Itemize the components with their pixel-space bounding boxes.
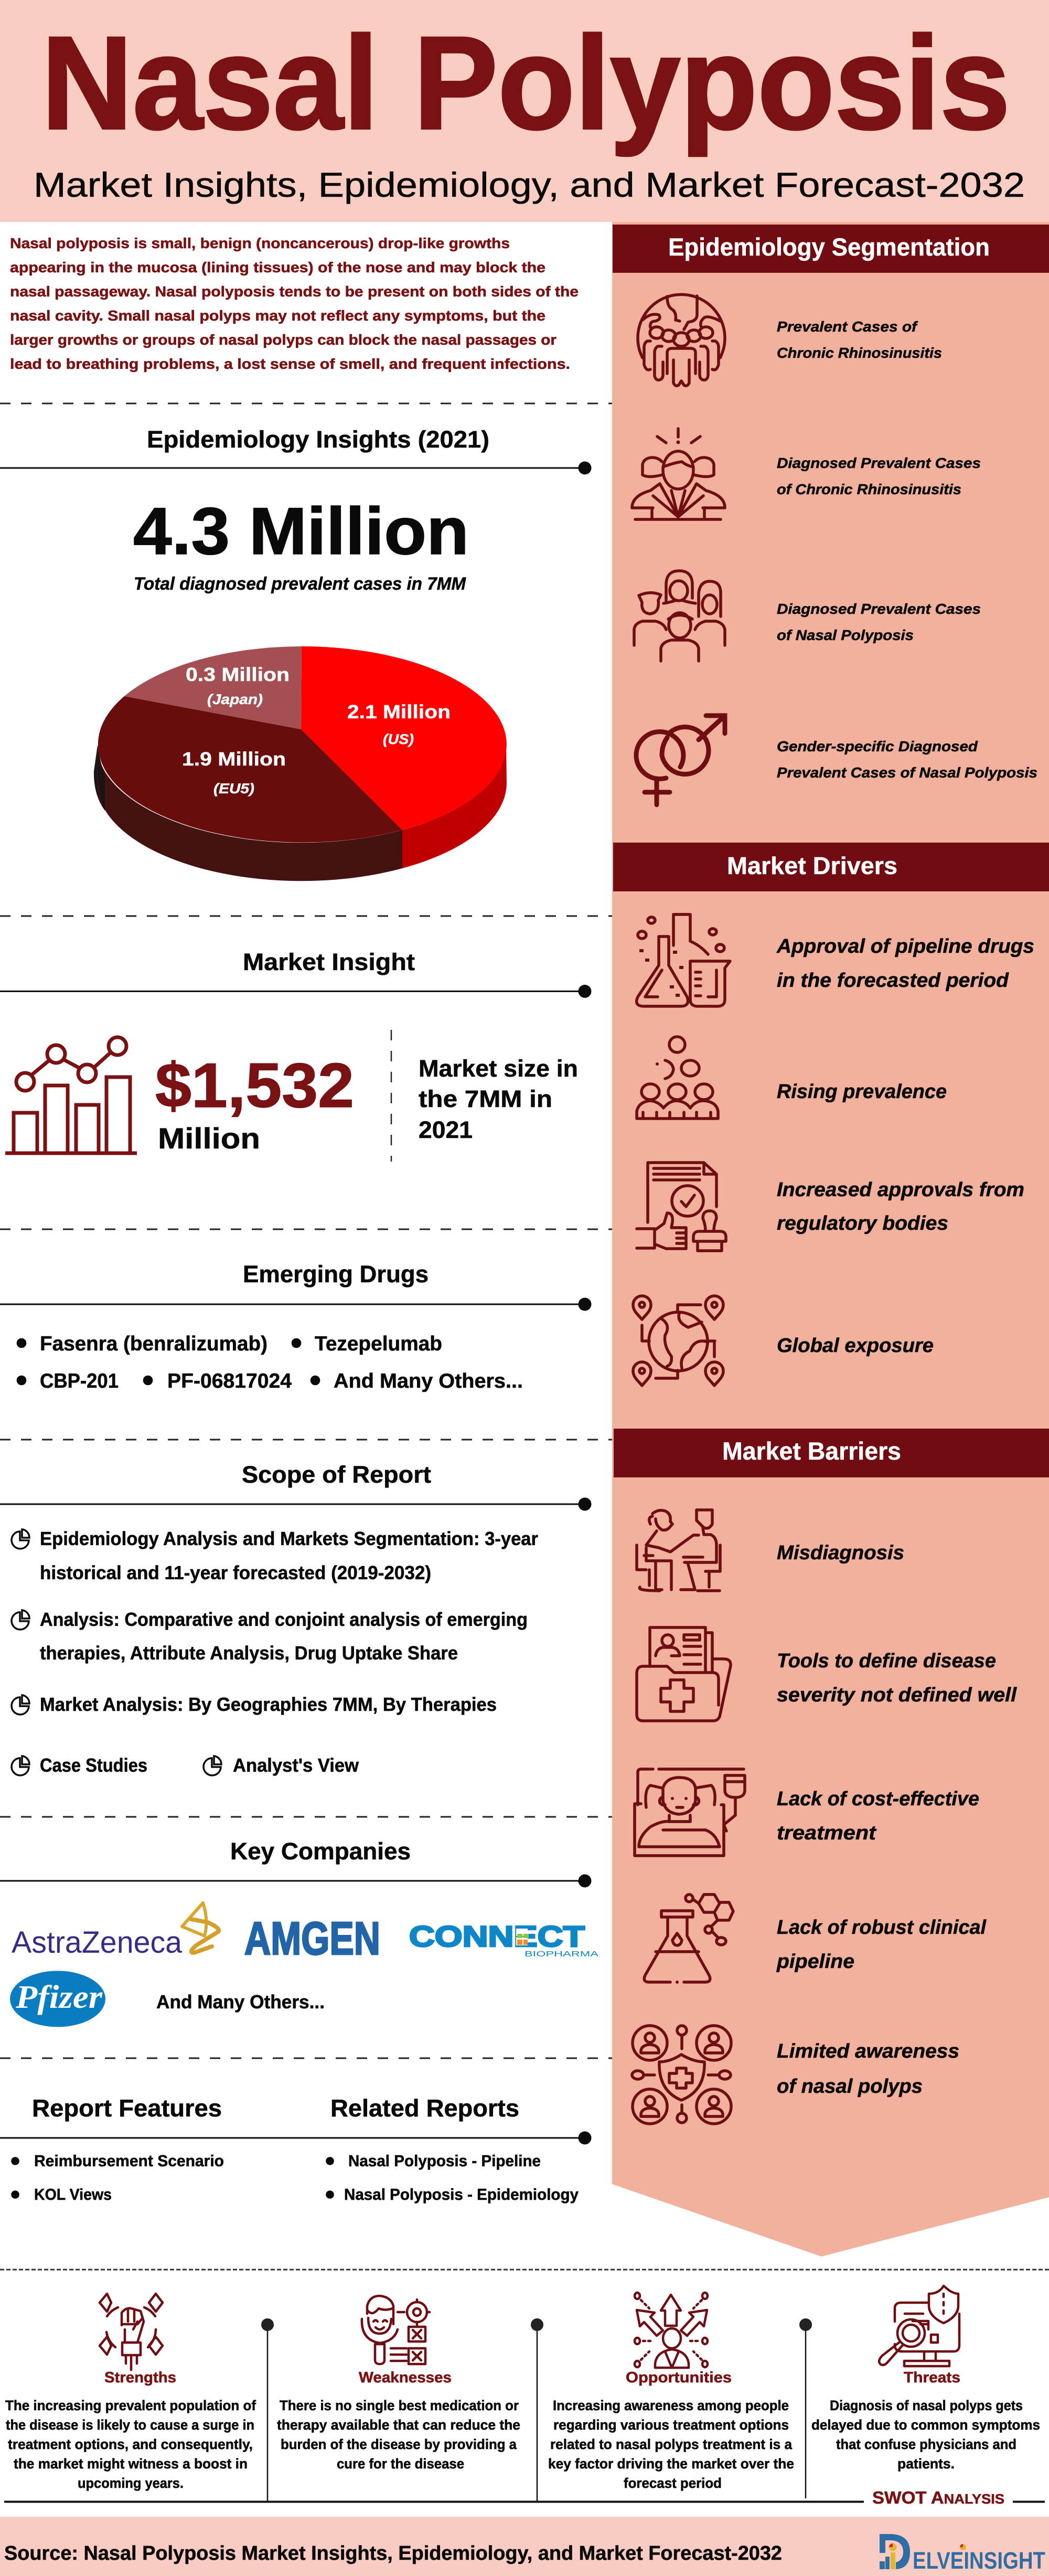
pie label: US: (US) [383,731,414,747]
heading bar: Market Barriers [722,1437,901,1465]
title: Nasal Polyposis [41,9,1010,157]
icon: doctor and patient [637,1510,720,1591]
feature and report lists: KOL Views [34,2185,112,2204]
logo: Amgen: AMGEN [244,1912,380,1964]
scope text: Epidemiology Analysis and Markets Segmentation: 3-year [40,1528,538,1549]
segment text 2: Diagnosed Prevalent Cases [777,455,981,471]
barrier text 3: treatment [777,1822,876,1844]
panel: emerging drugs [0,1261,592,1392]
segment text 4 [777,738,1037,781]
icon: awareness network [632,2026,731,2124]
other companies note: And Many Others... [156,1991,325,2013]
logo: Connect Biopharma: CONNECT [409,1920,585,1953]
barrier text 1: Misdiagnosis [777,1542,904,1564]
panel: scope of report [0,1461,592,1776]
icon: threat monitor [879,2286,959,2366]
feature and report lists: Reimbursement Scenario [34,2152,224,2170]
panel: epidemiology segmentation [613,225,1049,805]
intro text block: Nasal polyposis is small, benign (noncancerous) drop-like growths [10,235,510,251]
icon: diagnosed group [632,429,725,519]
heading bar: Epidemiology Segmentation [668,233,990,261]
driver text 1: in the forecasted period [777,970,1009,992]
heading: emerging drugs: Emerging Drugs [243,1261,429,1287]
barrier text 5: Limited awareness [777,2040,959,2062]
driver text 3: Increased approvals from [777,1179,1024,1201]
heading bar [614,1429,1049,1477]
description: opportunities: key factor driving the market over the [548,2456,794,2472]
intro text block: nasal passageway. Nasal polyposis tends to be present on both sides of the [10,283,579,300]
panel: market barriers [614,1429,1049,2124]
driver text 1 [776,935,1034,992]
panel: SWOT analysis [0,2270,1049,2507]
feature and report lists: Nasal Polyposis - Pipeline [348,2152,541,2170]
logo: Pfizer: Pfizer [15,1979,103,2015]
opportunities column [548,2293,794,2491]
description: threats [811,2398,1040,2472]
intro text block: appearing in the mucosa (lining tissues) of the nose and may block the [10,259,545,275]
segment text 2: of Chronic Rhinosinusitis [777,481,961,497]
description: strengths: upcoming years. [78,2475,184,2491]
description: opportunities [548,2398,794,2491]
description: strengths: the disease is likely to cause a surge in [6,2417,254,2433]
description: threats: Diagnosis of nasal polyps gets [830,2398,1023,2413]
market size description: the 7MM in [419,1085,552,1112]
panel: key companies [0,1838,598,2027]
icon: opportunity arrows [635,2293,708,2368]
logo: Connect Biopharma: BIOPHARMA [524,1950,598,1958]
icon: growth bar chart [5,1037,137,1153]
panel: report features and related reports [0,2094,592,2204]
icon: lab flasks [637,914,730,1006]
drug list: PF-06817024 [167,1370,292,1392]
heading bar: Market Drivers [727,852,897,879]
barrier text 5 [777,2040,959,2098]
drug list: Tezepelumab [315,1333,442,1355]
description: opportunities: related to nasal polyps treatment is a [550,2436,793,2452]
title: opportunities: Opportunities [626,2369,732,2386]
logo: DelveInsight [880,2534,1045,2574]
segment text 2 [777,455,981,497]
market size description [419,1055,578,1143]
3D pie chart [94,646,507,881]
strengths column [5,2294,256,2491]
logo: AstraZeneca: AstraZeneca [12,1925,183,1960]
description: threats: delayed due to common symptoms [811,2417,1040,2433]
description: threats: patients. [897,2456,955,2472]
barrier text 3: Lack of cost-effective [777,1788,979,1810]
logo: Pfizer [10,1971,105,2027]
intro text block: larger growths or groups of nasal polyps can block the nasal passages or [10,332,556,348]
barrier text 4: pipeline [776,1951,854,1973]
heading bar [613,225,1049,273]
scope text: Case Studies [40,1754,147,1776]
icon: weakness analysis [362,2296,430,2364]
description: strengths: The increasing prevalent population of [5,2398,256,2413]
panel: market drivers [613,843,1049,1386]
intro text block: nasal cavity. Small nasal polyps may not reflect any symptoms, but the [10,307,545,324]
description: weaknesses [277,2398,520,2472]
heading: market insight: Market Insight [243,949,415,975]
driver text 4: Global exposure [777,1335,934,1357]
description: opportunities: regarding various treatment options [553,2417,789,2433]
scope text: Analysis: Comparative and conjoint analysis of emerging [40,1609,528,1630]
description: threats: that confuse physicians and [836,2436,1016,2452]
threats column [811,2286,1040,2472]
icon: medical folder [637,1627,731,1721]
scope text: therapies, Attribute Analysis, Drug Uptake Share [40,1642,458,1664]
feature and report lists: Nasal Polyposis - Epidemiology [344,2185,579,2204]
pie label: US [347,701,451,747]
source line: Source: Nasal Polyposis Market Insights, Epidemiology, and Market Forecast-2032 [4,2542,782,2564]
barrier text 5: of nasal polyps [777,2075,923,2098]
big number: 4.3 Million [133,494,469,568]
pie label: EU5: (EU5) [213,781,254,796]
icon: patient in bed [635,1769,745,1856]
icon: regulatory approval [637,1163,726,1251]
drug list [17,1333,523,1392]
segment text 1 [777,318,942,361]
segment text 4: Prevalent Cases of Nasal Polyposis [777,764,1037,781]
description: weaknesses: There is no single best medication or [280,2398,519,2413]
description: weaknesses: cure for the disease [337,2456,464,2472]
panel: epidemiology insights [0,426,592,881]
caption: Total diagnosed prevalent cases in 7MM [134,574,466,594]
scope bullets [12,1529,221,1775]
intro text block [10,235,579,372]
drug list: CBP-201 [40,1370,119,1392]
SWOT label: SWOT ANALYSIS [872,2488,1004,2507]
icon: globe with people [638,294,725,386]
drug list: And Many Others... [334,1370,523,1392]
heading bar [613,843,1049,891]
description: strengths: treatment options, and consequently, [8,2436,253,2452]
pie label: EU5 [182,748,286,796]
unit: Million [158,1122,260,1155]
driver text 2: Rising prevalence [777,1081,947,1103]
drug list: Fasenra (benralizumab) [40,1333,267,1355]
title: strengths: Strengths [104,2369,176,2386]
barrier text 2: Tools to define disease [777,1650,996,1672]
header banner [0,0,1049,222]
market size description: Market size in [419,1055,578,1082]
driver text 3 [777,1179,1024,1234]
feature and report lists [12,2152,579,2204]
segment text 3: Diagnosed Prevalent Cases [777,601,981,617]
heading: epidemiology insights: Epidemiology Insights (2021) [147,426,489,453]
icon: strength fist [100,2294,163,2370]
pie label: Japan [186,664,290,707]
description: opportunities: forecast period [624,2475,722,2491]
description: strengths [5,2398,256,2491]
heading: key companies: Key Companies [230,1838,411,1865]
intro text block: lead to breathing problems, a lost sense of smell, and frequent infections. [10,356,570,372]
title: weaknesses: Weaknesses [359,2369,452,2386]
segment text 4: Gender-specific Diagnosed [777,738,978,754]
icon: gender symbols [636,716,725,805]
pie label: US: 2.1 Million [347,701,451,722]
pie label: Japan: 0.3 Million [186,664,290,685]
pie label: Japan: (Japan) [207,691,263,707]
heading: report features: Report Features [32,2094,222,2122]
barrier text 4: Lack of robust clinical [777,1917,987,1939]
barrier text 4 [776,1917,987,1973]
segment text 3 [777,601,981,643]
panel: right column background [612,222,1049,2256]
barrier text 2 [777,1650,1017,1706]
title: threats: Threats [904,2369,960,2386]
icon: family group [634,571,725,661]
weaknesses column [277,2296,520,2472]
scope text [40,1528,538,1776]
footer [0,2517,1049,2576]
description: weaknesses: therapy available that can reduce the [277,2417,520,2433]
logo: AstraZeneca [12,1903,219,1960]
axis lines [4,2318,1045,2502]
icon: rising population [637,1037,718,1119]
description: opportunities: Increasing awareness among people [553,2398,789,2413]
panel: market insight [0,949,592,1162]
icon: global pins [633,1296,723,1386]
description: strengths: the market might witness a boost in [14,2456,248,2472]
driver text 3: regulatory bodies [777,1212,948,1234]
barrier text 3 [777,1788,979,1844]
driver text 1: Approval of pipeline drugs [776,935,1034,957]
segment text 3: of Nasal Polyposis [777,627,914,643]
scope text: Market Analysis: By Geographies 7MM, By Therapies [40,1694,497,1715]
description: weaknesses: burden of the disease by providing a [281,2436,517,2452]
pie label: EU5: 1.9 Million [182,748,286,770]
scope text: historical and 11-year forecasted (2019-2032) [40,1562,431,1583]
segment text 1: Chronic Rhinosinusitis [777,345,942,361]
market size description: 2021 [419,1116,473,1143]
barrier text 2: severity not defined well [777,1684,1017,1706]
heading: related reports: Related Reports [330,2094,519,2122]
icon: flask with molecule [644,1894,733,1984]
logo: Connect Biopharma [409,1920,598,1958]
subtitle: Market Insights, Epidemiology, and Market Forecast-2032 [34,165,1025,204]
segment text 1: Prevalent Cases of [777,318,918,335]
market size value: $1,532 [155,1050,354,1121]
heading: scope of report: Scope of Report [242,1461,431,1488]
scope text: Analyst's View [233,1754,359,1776]
